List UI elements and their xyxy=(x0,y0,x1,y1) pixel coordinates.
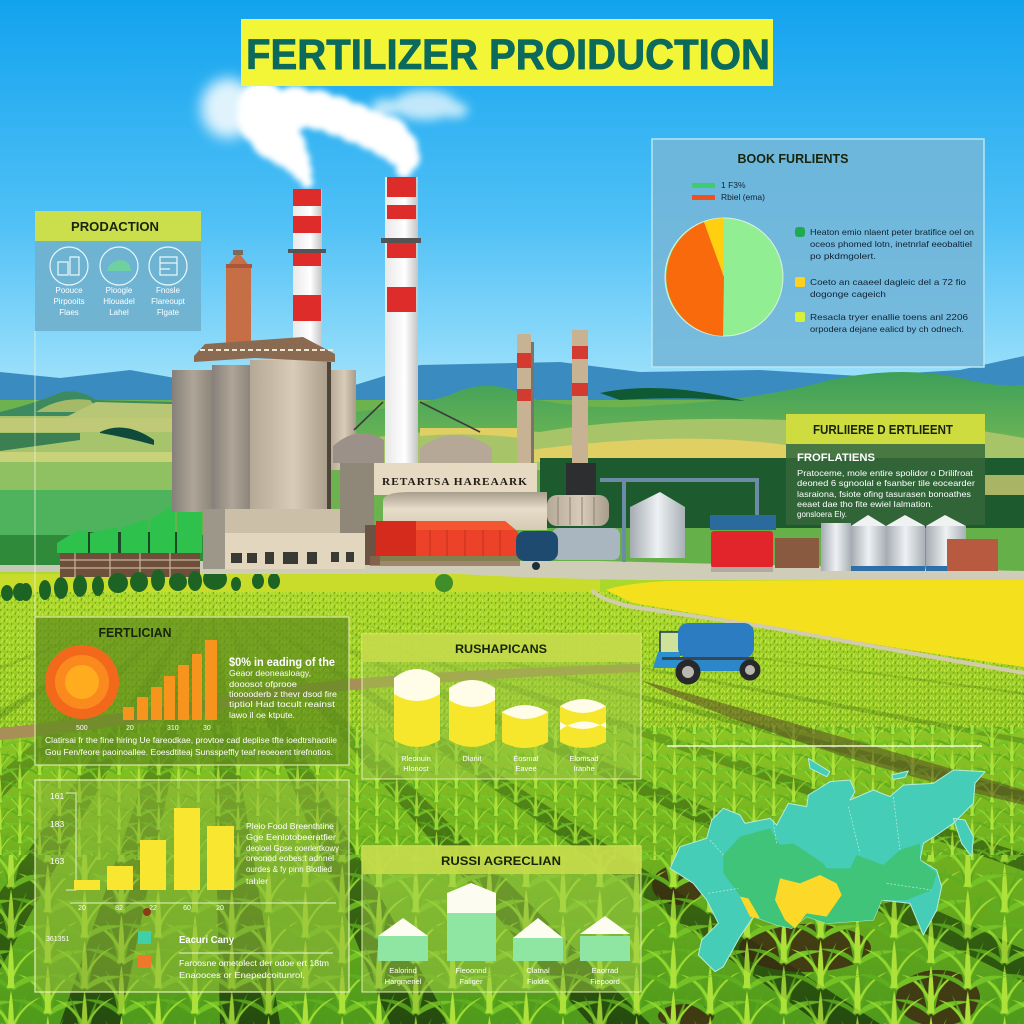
crop field xyxy=(0,572,1024,1024)
production captions: Poouce xyxy=(55,286,83,295)
fertilician notes: Geaor deoneasloagy, xyxy=(229,668,311,678)
axis numbers: 161 xyxy=(50,791,64,801)
chimney: tall red and white xyxy=(381,177,421,464)
legend xyxy=(138,908,333,980)
red tank and blue machine xyxy=(710,515,819,572)
tree line xyxy=(1,568,453,601)
silos xyxy=(172,337,356,512)
fertilician notes: $0% in eading of the xyxy=(229,655,335,669)
axis numbers: 22 xyxy=(149,905,157,912)
pressure tanks xyxy=(516,495,620,570)
axis numbers: 183 xyxy=(50,819,64,829)
pie legend: 1 F3% xyxy=(721,180,746,190)
icon: documents xyxy=(50,247,88,285)
legend: Enaooces or Enepedcoitunrol. xyxy=(179,970,305,980)
yellow rapeseed field xyxy=(592,579,1024,673)
map: teal regions xyxy=(670,758,985,972)
smoke plume xyxy=(201,78,468,188)
axis numbers: 361351 xyxy=(46,936,69,943)
house bar labels: Hargmenel xyxy=(385,977,422,986)
row of white silos xyxy=(821,515,966,571)
cylinder labels: Rleonuin xyxy=(401,754,431,763)
body text xyxy=(797,468,975,519)
legend: Faroosne ometolect der odoe ert 18tm xyxy=(179,958,329,968)
bar chart notes: Gge Eenlotobeeratfier xyxy=(246,832,336,842)
cylinder labels: Hlonost xyxy=(403,764,430,773)
house bar labels: Ealorind xyxy=(389,966,417,975)
chart axis labels: 30 xyxy=(203,725,211,732)
heading: book furlients: BOOK FURLIENTS xyxy=(738,151,849,166)
cylinder chart xyxy=(394,669,606,748)
house-shaped bars xyxy=(378,883,630,961)
panel: fertilician xyxy=(35,617,349,765)
axis numbers: 163 xyxy=(50,856,64,866)
production captions: Hlouadel xyxy=(103,297,135,306)
sub heading: FROFLATIENS xyxy=(797,452,875,464)
decorative map divider line xyxy=(667,745,982,747)
pie chart xyxy=(665,218,783,336)
map: green regions xyxy=(723,828,937,928)
bar chart notes: deoloel Gpse ooerlertkowy xyxy=(246,843,340,853)
pipe frame and steel silo xyxy=(600,480,757,562)
fertilician notes: Gou Fen/feore paoinoallee. Eoesdtiteaj Sunsspeffly teaf reoeoent tirefnotios. xyxy=(45,747,333,757)
chart axis labels: 500 xyxy=(76,725,88,732)
chart axis labels xyxy=(76,725,211,732)
cylinder labels: Eosmaf xyxy=(513,754,540,763)
axis numbers: 82 xyxy=(115,905,123,912)
pie legend: Rbiel (ema) xyxy=(721,192,765,202)
pie notes: Resacla tryer enallie toens anl 2206 xyxy=(810,312,968,322)
body text: eeaet dae tho fite ewiel Ialmation. xyxy=(797,499,933,509)
body text: Pratoceme, mole entire spolidor o Drilifroat xyxy=(797,468,974,478)
axis numbers: 20 xyxy=(78,905,86,912)
fertilician notes: dooosot ofprooe xyxy=(229,679,297,689)
panel: book furlients xyxy=(652,139,984,367)
orange bar chart xyxy=(123,640,217,720)
bar chart notes: ourdes & fy pinn Blotlied xyxy=(246,864,332,874)
fertilician notes: lawo il oe ktpute. xyxy=(229,710,295,720)
icon: cloud xyxy=(100,247,138,285)
green step chart xyxy=(57,484,202,577)
axis numbers: 20 xyxy=(216,905,224,912)
body text: gonsloera Ely. xyxy=(797,509,847,519)
cylinder labels: Iranhe xyxy=(573,764,595,773)
production captions: Flgate xyxy=(157,308,180,317)
body text: lasraiona, fsiote ofing tasurasen bonoathes xyxy=(797,489,971,499)
chart axis labels: 20 xyxy=(126,725,134,732)
chart axes xyxy=(66,793,336,903)
axis numbers: 60 xyxy=(183,905,191,912)
fertilician notes: tiooooderb z thevr dsod fire xyxy=(229,689,337,699)
guide line xyxy=(34,331,36,617)
production captions: Pirpooits xyxy=(53,297,85,306)
heading: rushapicans: RUSHAPICANS xyxy=(455,642,547,656)
production captions: Ploogle xyxy=(106,286,133,295)
bar chart notes xyxy=(246,821,340,886)
bar chart notes: oreonod eobes:t adnnel xyxy=(246,853,334,863)
bars xyxy=(74,808,234,890)
pie notes: po pkdmgolert. xyxy=(810,251,876,261)
cylinder labels: Dlanit xyxy=(462,754,482,763)
house bar labels xyxy=(385,966,620,986)
axis numbers xyxy=(46,791,224,943)
background mountains xyxy=(0,356,1024,420)
icon: concentric circle chart xyxy=(45,645,119,719)
building sign: RETARTSA HAREAARK xyxy=(382,476,528,488)
fertilician notes: tiptiol Had tocult reainst xyxy=(229,699,336,709)
fertilician notes: Clatirsai fr the fine hiring Ue fareodkae, provtoe cad deplise tfte ioedtrshaotiie xyxy=(45,735,337,745)
factory complex xyxy=(172,177,1024,580)
title banner: FERTILIZER PROIDUCTION xyxy=(246,31,770,79)
main building xyxy=(340,463,547,566)
panel: russi agreclian xyxy=(362,846,641,992)
production captions: Lahel xyxy=(109,308,129,317)
legend: Eacuri Cany xyxy=(179,935,234,946)
base building with windows xyxy=(203,509,365,569)
chart axis labels: 310 xyxy=(167,725,179,732)
pie notes: Heaton emio nlaent peter bratifice oel on xyxy=(810,227,974,237)
pie legend xyxy=(692,180,765,202)
production captions xyxy=(53,286,186,317)
cylinder labels xyxy=(401,754,599,773)
cylinder labels: Elomsad xyxy=(569,754,599,763)
production captions: Flareoupt xyxy=(151,297,186,306)
bar chart notes: tahler xyxy=(246,876,268,886)
house bar labels: Fiepoord xyxy=(590,977,620,986)
chimney: brown xyxy=(226,250,252,345)
heading: furthered fertilient: FURLIIERE D ERTLIEENT xyxy=(813,422,953,437)
house bar labels: Faliger xyxy=(460,977,483,986)
panel: production xyxy=(35,211,201,331)
panel: furthered fertilient xyxy=(786,414,985,525)
chimney: red and white left xyxy=(288,189,326,354)
small far chimneys xyxy=(517,330,596,496)
map of russia xyxy=(670,758,985,972)
pie notes xyxy=(795,227,974,334)
body text: deoned 6 sgnoolal e fsanber tile eocearder xyxy=(797,478,975,488)
map: yellow regions xyxy=(740,875,842,928)
panel: rushapicans xyxy=(362,634,641,779)
factory ground xyxy=(200,561,1024,580)
panel: yellow bar chart xyxy=(35,780,349,992)
house bar labels: Fioldie xyxy=(527,977,549,986)
title banner xyxy=(241,19,773,86)
heading: production: PRODACTION xyxy=(71,219,159,234)
bar chart notes: Pleio Food Breenthtine xyxy=(246,821,334,831)
pie notes: dogonge cageich xyxy=(810,289,886,299)
pie notes: orpodera dejane ealicd by ch odnech. xyxy=(810,324,964,334)
icon: form xyxy=(149,247,187,285)
house bar labels: Clatnal xyxy=(526,966,550,975)
tractor xyxy=(653,623,760,684)
heading: russi agreclian: RUSSI AGRECLIAN xyxy=(441,854,561,868)
pie notes: Coeto an caaeel dagleic del a 72 fio xyxy=(810,277,966,287)
rolling green hills xyxy=(0,372,1024,575)
house bar labels: Eaorrad xyxy=(592,966,618,975)
cylinder labels: Eavee xyxy=(515,764,537,773)
pie notes: oceos phomed lotn, inetnrlaf eeobaltiel xyxy=(810,239,972,249)
production captions: Fnosle xyxy=(156,286,181,295)
production captions: Flaes xyxy=(59,308,79,317)
sky background xyxy=(0,0,1024,400)
fertilician notes xyxy=(45,655,337,757)
shipping container xyxy=(947,539,998,571)
heading: fertilician: FERTLICIAN xyxy=(98,625,172,640)
house bar labels: Fleoonnd xyxy=(455,966,487,975)
domes xyxy=(333,402,492,463)
